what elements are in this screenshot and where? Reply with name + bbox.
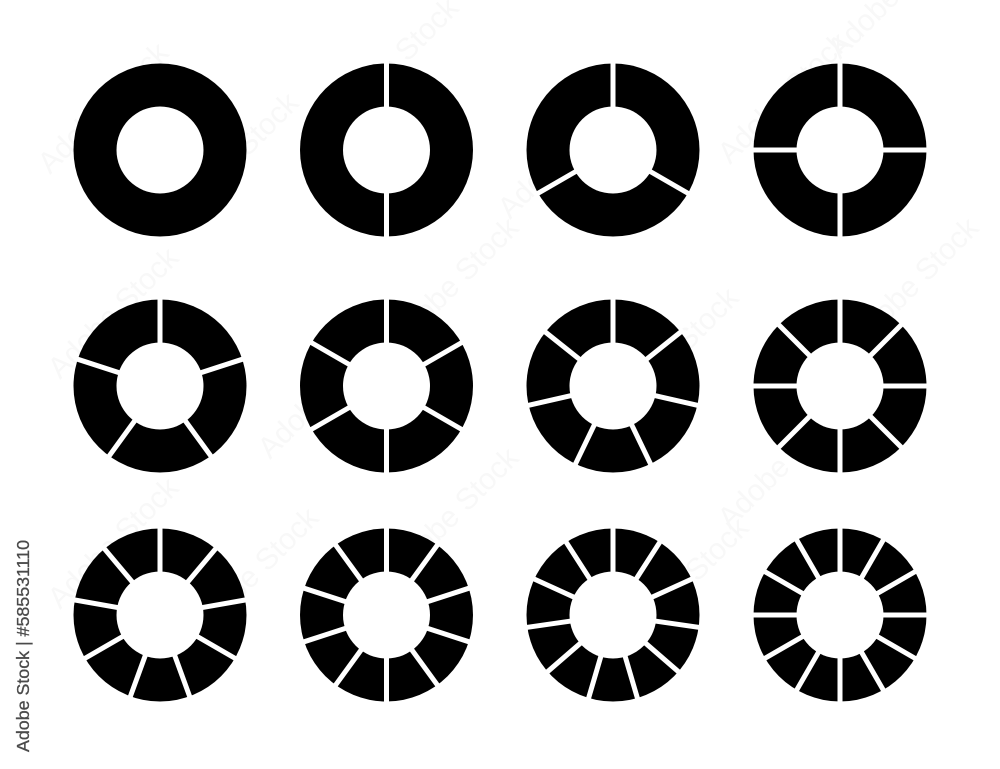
text: Adobe Stock: [252, 321, 396, 465]
donut: 4 segments: [750, 60, 930, 240]
donut: 8 segments: [750, 296, 930, 476]
text: Adobe Stock: [712, 26, 856, 170]
text: Adobe Stock: [382, 211, 526, 355]
text: Adobe Stock: [162, 86, 306, 230]
stock credit text: Adobe Stock | #585531110: [13, 540, 33, 752]
text: Adobe Stock: [842, 211, 986, 355]
donut: 12 segments: [750, 525, 930, 705]
donut: 11 segments: [524, 525, 702, 702]
text: Adobe Stock: [712, 391, 856, 535]
donut: 2 segments: [300, 60, 473, 240]
text: Adobe Stock: [182, 501, 326, 645]
donut: 5 segments: [74, 296, 246, 472]
text: Adobe Stock: [602, 281, 746, 425]
donut: 10 segments: [300, 525, 473, 705]
donut: 1 segment: [74, 64, 246, 236]
text: Adobe Stock: [382, 441, 526, 585]
donut: 3 segments: [526, 60, 700, 236]
text: Adobe Stock: [32, 36, 176, 180]
text: Adobe Stock: [492, 81, 636, 225]
text: Adobe Stock: [612, 511, 756, 655]
donut: 7 segments: [525, 296, 701, 472]
text: Adobe Stock: [42, 241, 186, 385]
text: Adobe Stock: [42, 471, 186, 615]
donut: 9 segments: [71, 525, 249, 702]
donut: 6 segments: [300, 296, 473, 476]
